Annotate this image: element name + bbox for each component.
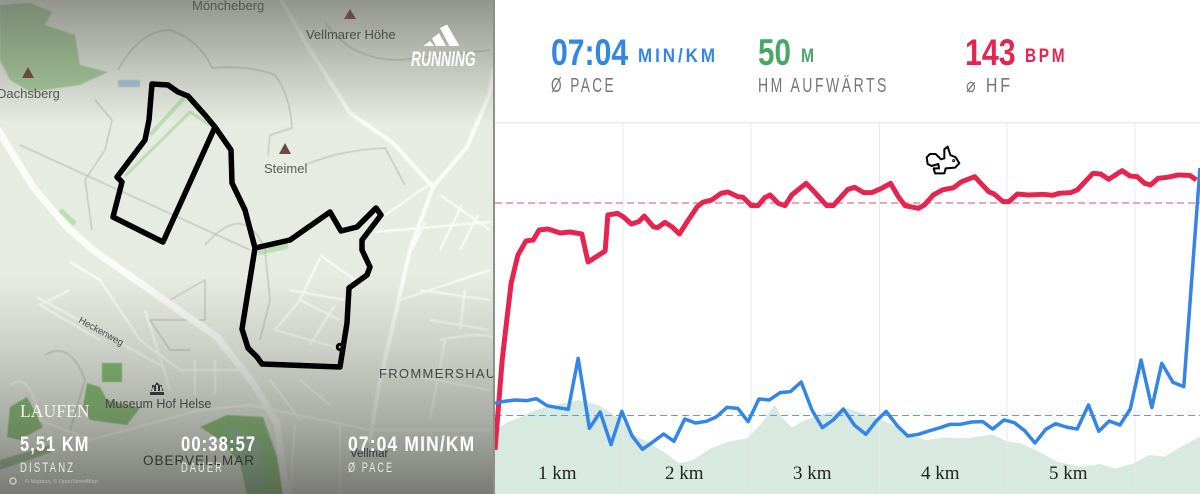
stat: distance (20, 433, 90, 475)
axis label: 3 km: 3 km (793, 463, 832, 484)
metric: heart rate: BPM (1025, 45, 1067, 67)
metric: heart rate: ⌀ HF (966, 75, 1013, 97)
axis label: 5 km: 5 km (1049, 463, 1088, 484)
panel divider (493, 0, 495, 494)
elevation area (495, 400, 1200, 494)
stat: pace: Ø PACE (348, 459, 394, 475)
map label: Museum Hof Helse: Museum Hof Helse (105, 397, 211, 411)
metric: elevation: 50 (758, 32, 791, 73)
metric: elevation (758, 32, 889, 97)
heart rate line (495, 171, 1196, 450)
icon: mountain Vellmarer Höhe (344, 9, 356, 19)
map label: Frommershausen: FROMMERSHAU (379, 366, 495, 381)
stat: pace: 07:04 MIN/KM (348, 433, 475, 456)
icon: mountain Steimel (279, 143, 291, 154)
activity title: LAUFEN (20, 401, 90, 421)
icon: mountain Dachsberg (22, 67, 34, 78)
attribution: © Mapbox, © OpenStreetMap (25, 478, 98, 485)
map label: Vellmarer Höhe: Vellmarer Höhe (306, 27, 396, 42)
route (113, 84, 381, 367)
metric: pace (551, 32, 718, 97)
icon: rabbit (927, 147, 959, 173)
logo: adidas stripes (424, 24, 460, 46)
green meadow strips (60, 97, 288, 252)
icon: museum (150, 382, 164, 395)
map label: Steimel: Steimel (264, 161, 307, 176)
stat: duration: DAUER (181, 459, 224, 475)
pace line (495, 168, 1200, 449)
map panel (0, 0, 495, 494)
stat: pace (348, 433, 475, 475)
stat: distance: DISTANZ (20, 459, 75, 475)
contour lines (20, 22, 490, 430)
map label: Heckenweg: Heckenweg (77, 315, 125, 349)
streets (10, 182, 495, 494)
metric: heart rate (965, 32, 1067, 97)
axis label: 4 km: 4 km (921, 463, 960, 484)
major roads (0, 0, 493, 494)
chart (495, 122, 1200, 494)
stat: duration: 00:38:57 (181, 433, 256, 456)
axis label: 1 km: 1 km (538, 463, 577, 484)
map label: Obervellmar: OBERVELLMAR (143, 453, 255, 468)
metric: heart rate: 143 (965, 32, 1016, 73)
stat: distance: 5,51 KM (20, 433, 90, 456)
metric: elevation: HM AUFWÄRTS (758, 75, 889, 97)
heart rate average line (495, 202, 1200, 204)
logo text: RUNNING: RUNNING (411, 48, 476, 71)
stat: duration (181, 433, 256, 475)
metric: elevation: M (801, 45, 817, 67)
pace average line (495, 414, 1200, 416)
axis label: 2 km: 2 km (665, 463, 704, 484)
metric: pace: 07:04 (551, 32, 628, 73)
metric: pace: Ø PACE (551, 75, 616, 97)
map label: Vellmar: Vellmar (350, 448, 389, 460)
metric: pace: MIN/KM (638, 45, 718, 67)
